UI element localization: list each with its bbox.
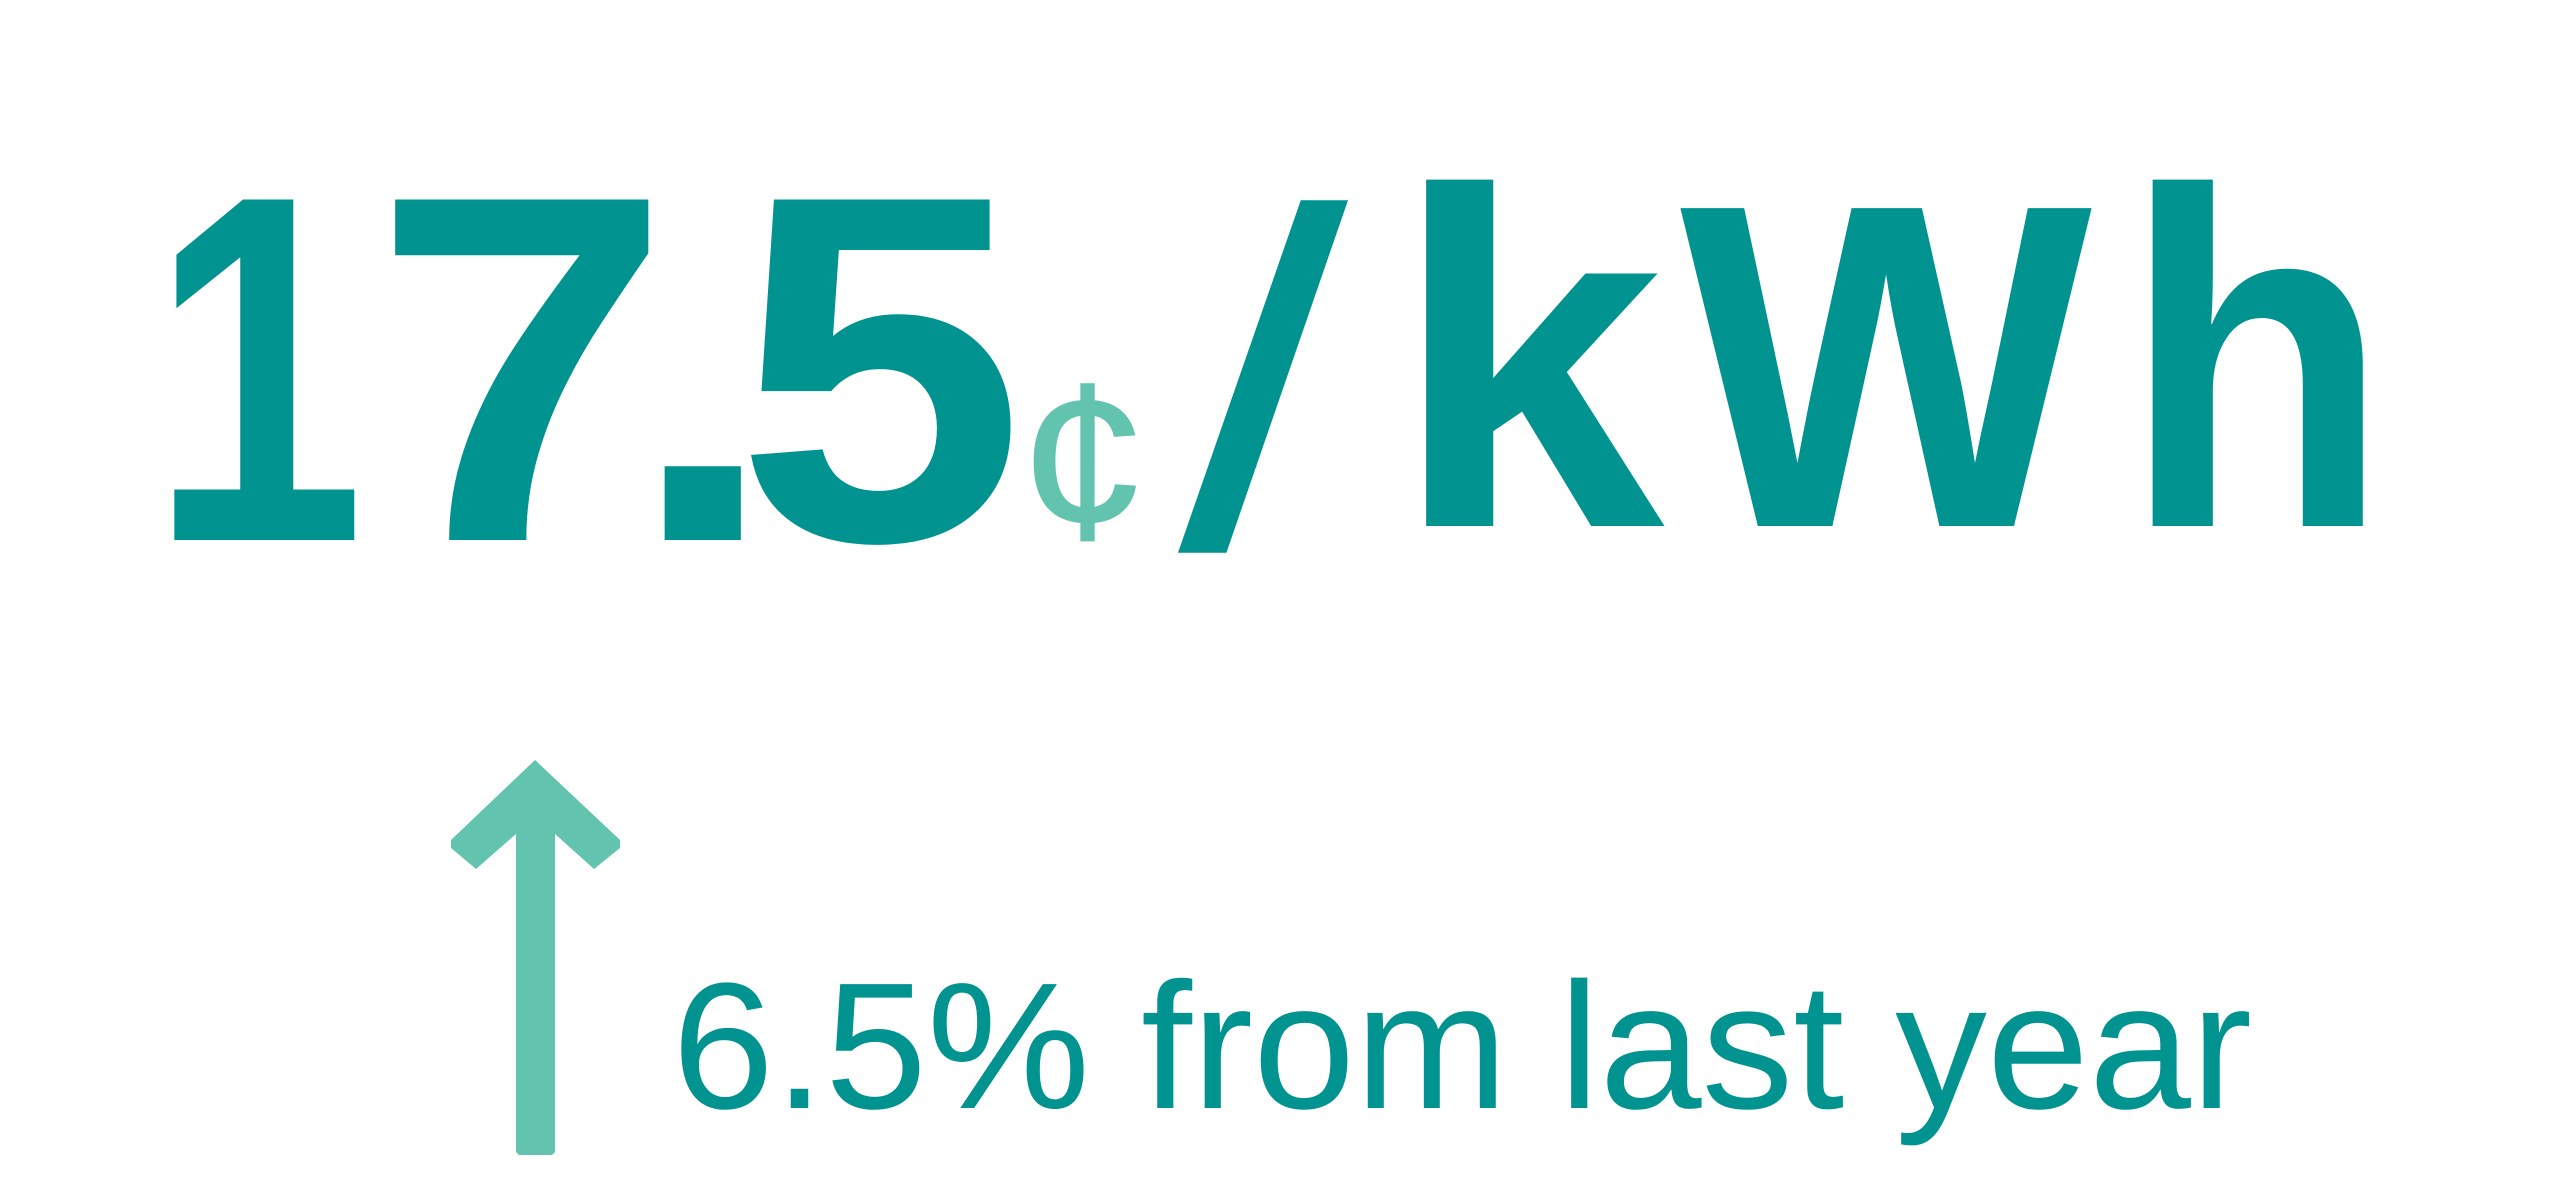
value 17.5 <box>150 92 1025 645</box>
icon: up arrow <box>451 760 620 1155</box>
unit W: W <box>1680 108 2096 624</box>
slash: / <box>1178 113 1350 650</box>
value 17.5: 1 <box>150 92 365 645</box>
change text: 6.5% from last year <box>672 946 2252 1147</box>
cent sign: ¢ <box>1018 334 1150 586</box>
unit h: h <box>2122 94 2390 628</box>
headline: price per kWh <box>150 92 2390 650</box>
value 17.5: 7 <box>372 92 672 645</box>
value 17.5: . <box>628 92 778 645</box>
value 17.5: 5 <box>735 92 1025 645</box>
unit k: k <box>1392 94 1667 628</box>
